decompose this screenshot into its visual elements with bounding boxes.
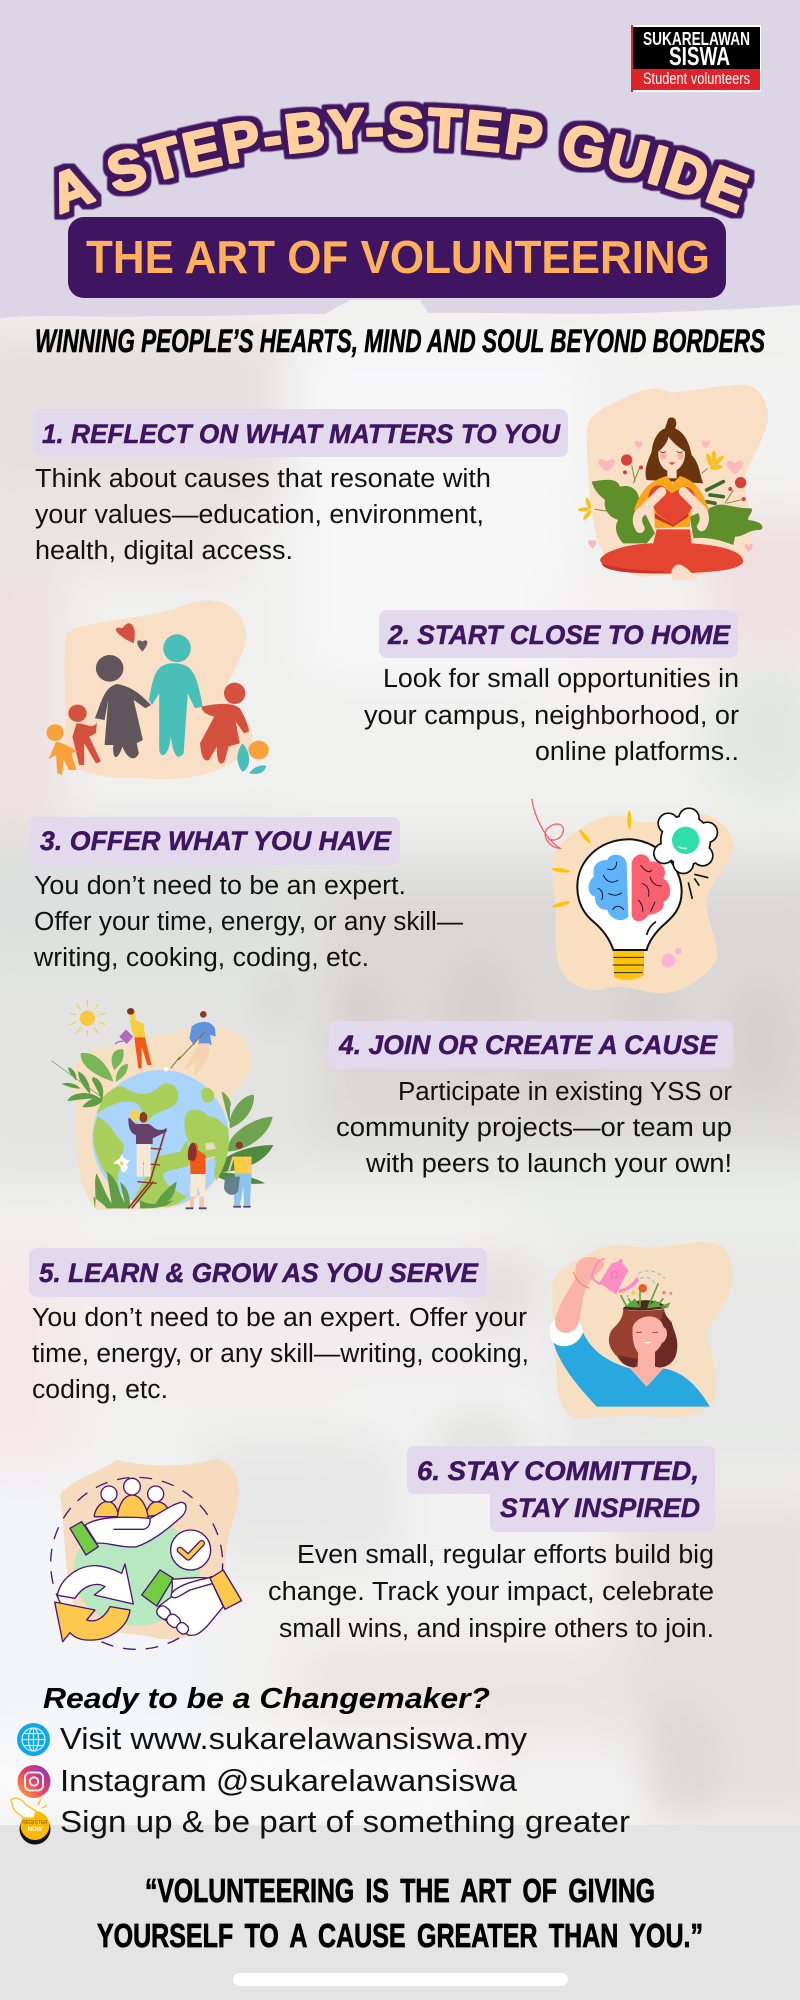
- icon: instagram: [18, 1765, 50, 1798]
- step 5 heading: 5. LEARN & GROW AS YOU SERVE: [39, 1258, 479, 1288]
- CTA website: Visit www.sukarelawansiswa.my: [60, 1721, 528, 1756]
- title banner: THE ART OF VOLUNTEERING: [86, 231, 710, 283]
- step 2 text: Look for small opportunities in: [383, 665, 739, 693]
- step 3 heading: [30, 817, 400, 865]
- step 6 heading: 6. STAY COMMITTED,: [417, 1456, 699, 1486]
- step 1 text: Think about causes that resonate with: [35, 465, 491, 493]
- step 5 text: time, energy, or any skill—writing, cooking,: [32, 1340, 529, 1368]
- step 3 heading: 3. OFFER WHAT YOU HAVE: [40, 826, 392, 856]
- step 4 heading: [329, 1021, 733, 1069]
- closing quote: [97, 1872, 703, 1954]
- step 1 text: your values—education, environment,: [35, 501, 484, 529]
- step 5 heading: [29, 1248, 487, 1297]
- title arc: A Step-by-Step Guide: A STEP-BY-STEP GUIDE: [53, 100, 756, 220]
- step 2 text: your campus, neighborhood, or: [364, 702, 740, 730]
- step 5 text: coding, etc.: [32, 1376, 168, 1404]
- icon: register now button: NOW: [28, 1827, 43, 1833]
- step 6 text: [268, 1541, 714, 1643]
- step 1: [33, 385, 768, 580]
- logo: Sukarelawan Siswa: [631, 25, 761, 92]
- step 1 text: health, digital access.: [35, 537, 293, 565]
- logo: Sukarelawan Siswa: SISWA: [669, 41, 730, 71]
- step 4: [51, 1000, 733, 1210]
- step 1 heading: 1. REFLECT ON WHAT MATTERS TO YOU: [42, 419, 561, 449]
- logo: Sukarelawan Siswa: SUKARELAWAN: [643, 29, 750, 49]
- logo: Sukarelawan Siswa: Student volunteers: [643, 69, 750, 88]
- step 3 text: [33, 872, 463, 972]
- step 2 text: online platforms..: [535, 738, 739, 766]
- step 6 text: change. Track your impact, celebrate: [268, 1578, 714, 1606]
- step 4 text: Participate in existing YSS or: [398, 1078, 733, 1106]
- step 4 text: community projects—or team up: [336, 1114, 732, 1142]
- step 4 heading: 4. JOIN OR CREATE A CAUSE: [338, 1030, 718, 1060]
- CTA sign up: Sign up & be part of something greater: [60, 1804, 630, 1839]
- step 1 heading: [33, 409, 568, 457]
- step 3: [30, 799, 733, 993]
- step 6 heading: STAY INSPIRED: [500, 1493, 700, 1523]
- step 5 text: [32, 1304, 529, 1404]
- CTA instagram: Instagram @sukarelawansiswa: [60, 1763, 518, 1798]
- step 5: [29, 1242, 733, 1418]
- step 2 heading: 2. START CLOSE TO HOME: [387, 620, 731, 650]
- step 4 text: with peers to launch your own!: [365, 1150, 732, 1178]
- illustration: meditating woman: [578, 385, 768, 580]
- step 6: [51, 1446, 715, 1649]
- step 5 text: You don’t need to be an expert. Offer your: [32, 1304, 528, 1332]
- illustration: light bulb brain: [532, 799, 733, 993]
- CTA heading: Ready to be a Changemaker?: [43, 1683, 490, 1715]
- step 2: [46, 600, 740, 779]
- illustration: watering a growing mind: [550, 1242, 733, 1418]
- title banner: [68, 217, 726, 298]
- illustration: helping hands: [51, 1458, 242, 1649]
- step 2 heading: [379, 610, 738, 658]
- icon: register now button: REGISTER: [22, 1820, 48, 1826]
- step 3 text: You don’t need to be an expert.: [34, 872, 406, 900]
- icon: register now button: [11, 1798, 50, 1844]
- step 3 text: writing, cooking, coding, etc.: [33, 944, 369, 972]
- top lavender torn band: [0, 0, 800, 318]
- step 3 text: Offer your time, energy, or any skill—: [34, 908, 463, 936]
- step 1 text: [35, 465, 491, 565]
- call to action: [11, 1683, 630, 1844]
- step 6 text: Even small, regular efforts build big: [297, 1541, 714, 1569]
- icon: globe: [17, 1723, 50, 1756]
- step 4 text: [336, 1078, 733, 1178]
- bottom grey band: [0, 1825, 800, 2000]
- step 6 heading: [407, 1446, 715, 1532]
- illustration: people caring for globe: [51, 1000, 273, 1210]
- white pill bar: [233, 1973, 568, 1986]
- illustration: family: [46, 600, 269, 779]
- step 2 text: [364, 665, 740, 766]
- step 6 text: small wins, and inspire others to join.: [279, 1615, 714, 1643]
